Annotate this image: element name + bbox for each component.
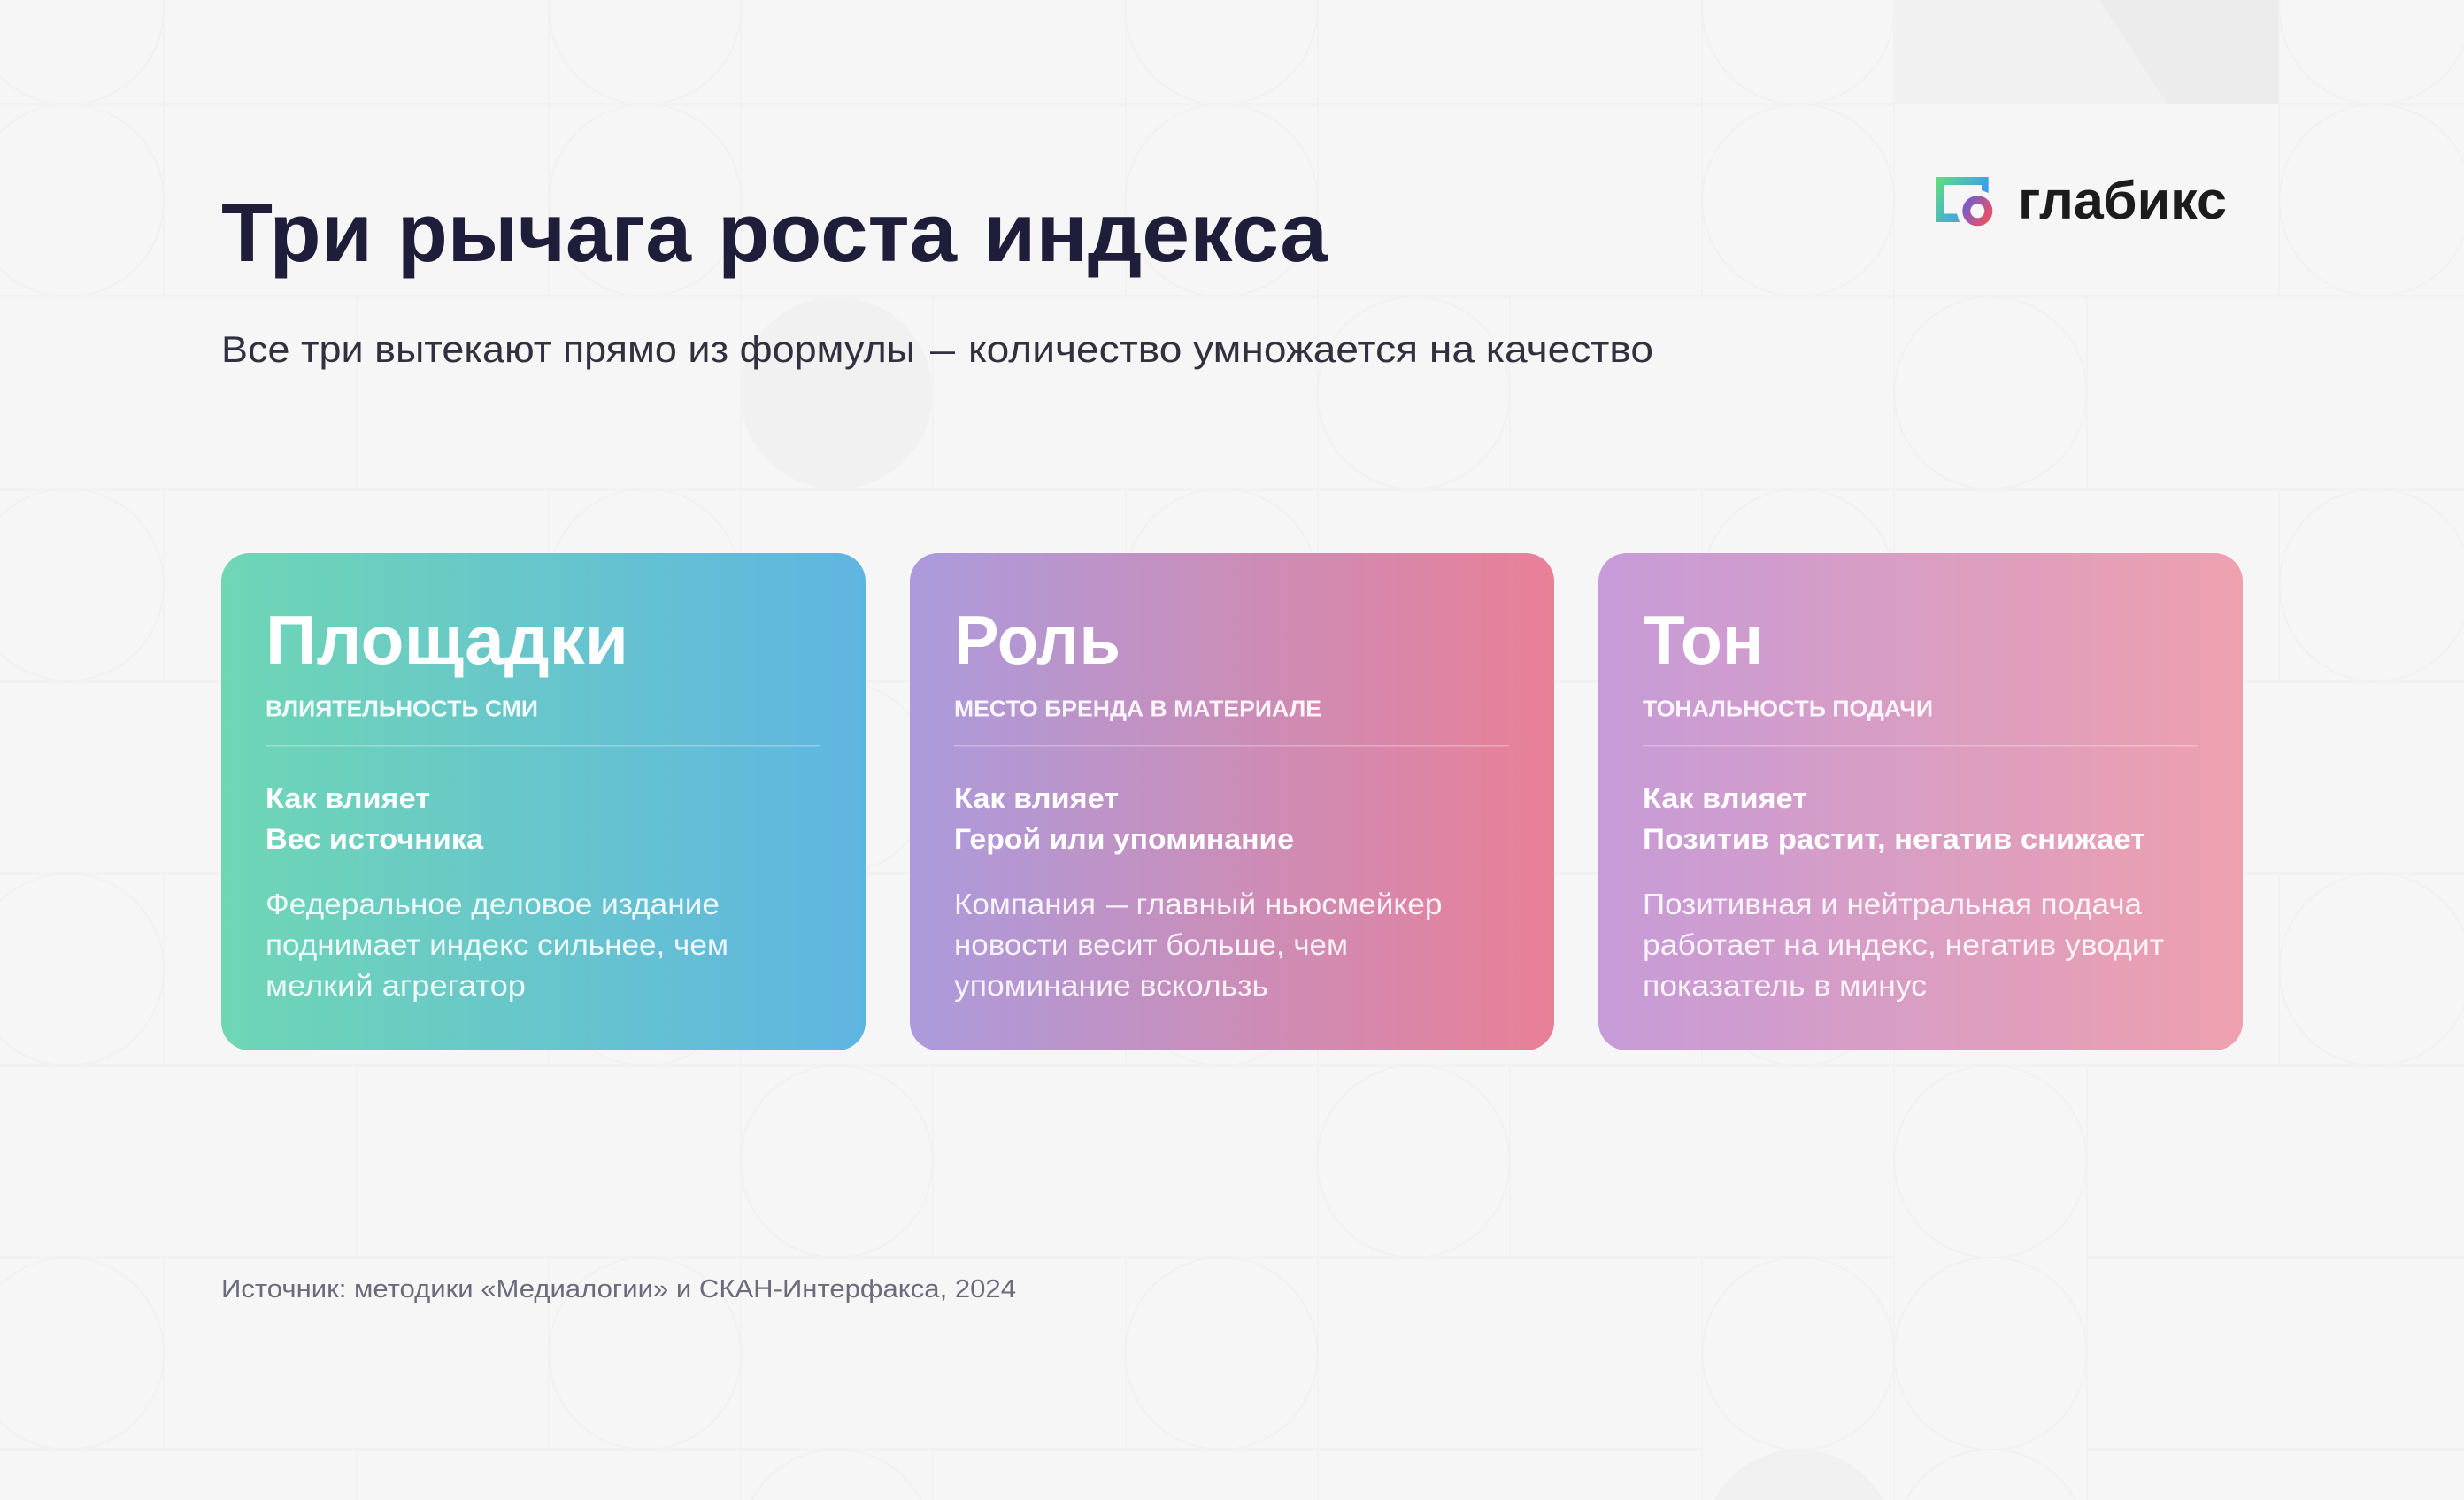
description: показатель в минус bbox=[1643, 969, 1927, 1002]
title: роста bbox=[718, 186, 958, 279]
how it affects: Позитив растит, негатив снижает bbox=[1643, 823, 2145, 855]
description: Компания bbox=[954, 888, 1096, 920]
divider bbox=[1643, 745, 2198, 747]
how it affects: Как влияет bbox=[1643, 782, 1807, 814]
card text: Тон bbox=[1643, 601, 2198, 1002]
divider bbox=[954, 745, 1509, 747]
logo wordmark: глабикс bbox=[2018, 171, 2227, 230]
subtitle: Все три вытекают прямо из формулы bbox=[221, 328, 915, 370]
title: Три bbox=[221, 186, 373, 279]
card subheading: ТОНАЛЬНОСТЬ ПОДАЧИ bbox=[1643, 696, 1933, 722]
card text: Площадки bbox=[266, 601, 820, 1002]
how it affects: Как влияет bbox=[266, 782, 430, 814]
card subheading: ВЛИЯТЕЛЬНОСТЬ СМИ bbox=[266, 696, 538, 722]
description: Позитивная и нейтральная подача bbox=[1643, 888, 2143, 920]
card heading: Тон bbox=[1643, 601, 1763, 679]
title bbox=[221, 186, 1328, 279]
description: работает на индекс, негатив уводит bbox=[1643, 928, 2164, 961]
panel: card Роль background bbox=[910, 553, 1554, 1050]
title: индекса bbox=[983, 186, 1328, 279]
card heading: Роль bbox=[954, 601, 1120, 679]
description: мелкий агрегатор bbox=[266, 969, 526, 1002]
description: Федеральное деловое издание bbox=[266, 888, 720, 920]
description bbox=[1643, 888, 2164, 1002]
how it affects: Как влияет bbox=[954, 782, 1119, 814]
how it affects: Вес источника bbox=[266, 823, 483, 855]
how it affects bbox=[1643, 782, 2145, 855]
description: новости весит больше, чем bbox=[954, 928, 1348, 961]
description bbox=[954, 888, 1443, 1002]
description bbox=[266, 888, 728, 1002]
description: упоминание вскользь bbox=[954, 969, 1268, 1002]
description: поднимает индекс сильнее, чем bbox=[266, 928, 728, 961]
subtitle: — bbox=[930, 328, 955, 370]
icon: logo frame and ring bbox=[1936, 177, 1989, 222]
card text: Роль bbox=[954, 601, 1509, 1002]
panel: card Тон background bbox=[1598, 553, 2243, 1050]
divider bbox=[266, 745, 820, 747]
card heading: Площадки bbox=[266, 601, 628, 679]
logo: глабикс bbox=[1936, 171, 2227, 230]
subtitle bbox=[221, 328, 1653, 370]
how it affects: Герой или упоминание bbox=[954, 823, 1294, 855]
source note: Источник: методики «Медиалогии» и СКАН-Интерфакса, 2024 bbox=[221, 1275, 1016, 1304]
description: главный ньюсмейкер bbox=[1136, 888, 1443, 920]
how it affects bbox=[954, 782, 1294, 855]
title: рычага bbox=[397, 186, 692, 279]
description: — bbox=[1106, 888, 1128, 920]
how it affects bbox=[266, 782, 483, 855]
card subheading: МЕСТО БРЕНДА В МАТЕРИАЛЕ bbox=[954, 696, 1321, 722]
panel: card Площадки background bbox=[221, 553, 866, 1050]
subtitle: количество умножается на качество bbox=[968, 328, 1653, 370]
